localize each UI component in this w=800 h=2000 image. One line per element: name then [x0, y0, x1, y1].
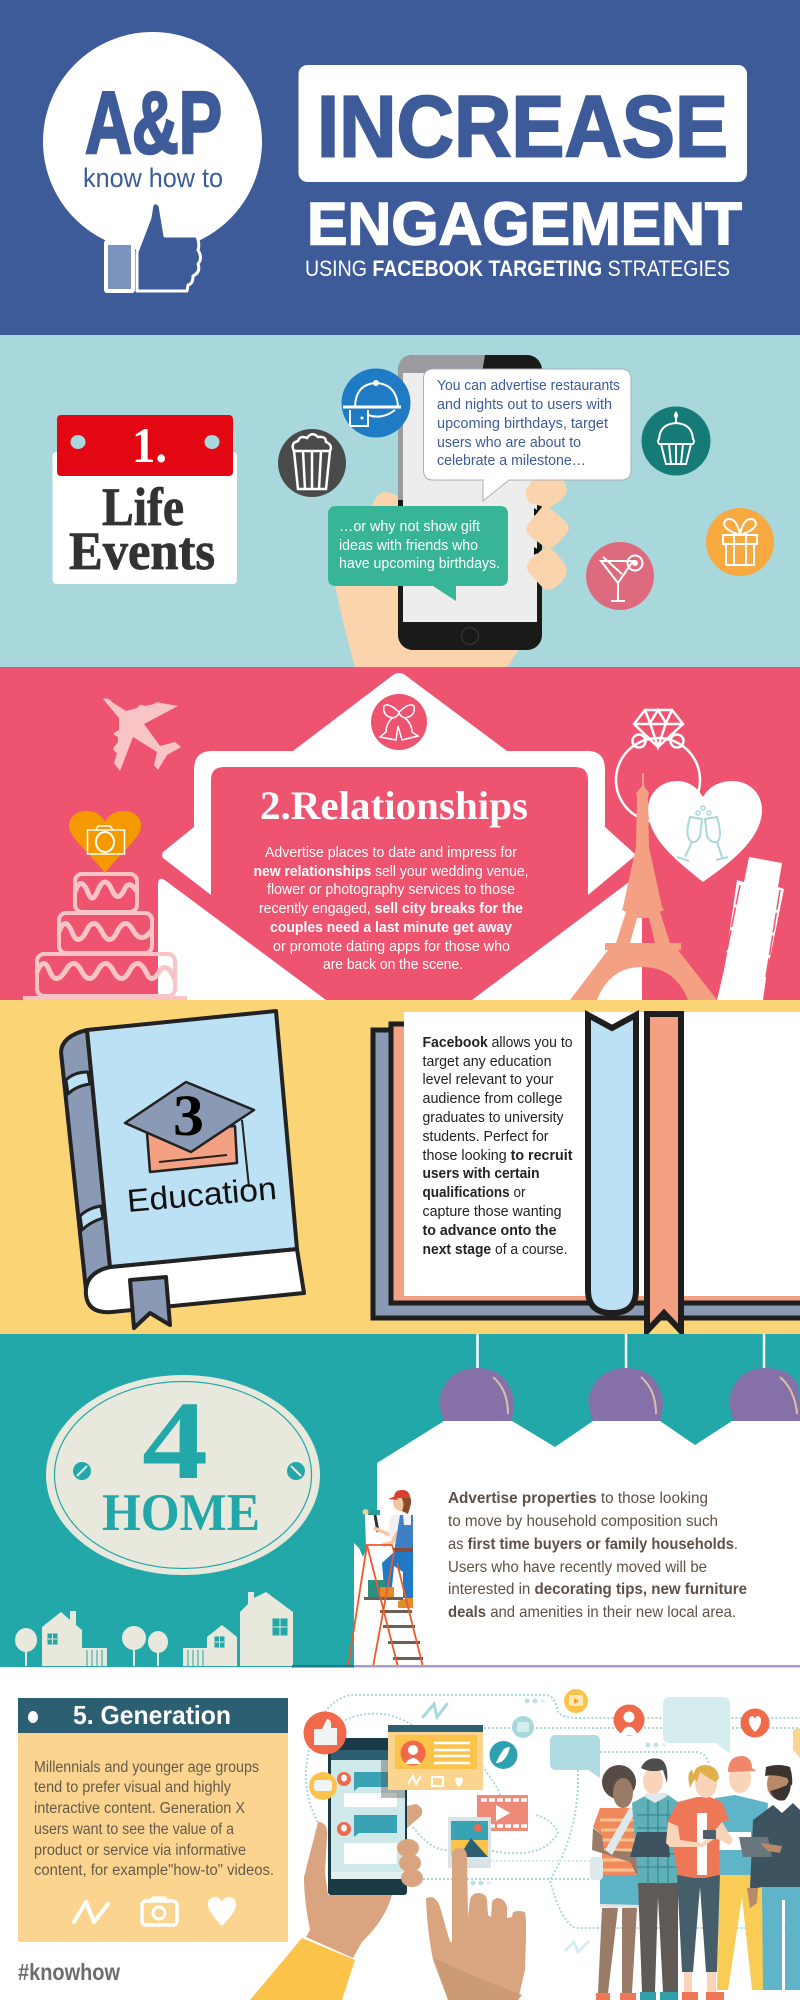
- speech bubble: restaurants: [424, 369, 631, 501]
- panel: generation: [0, 1668, 800, 2000]
- speech bubble: gift ideas: ideas with friends who: [339, 537, 478, 554]
- text: home body: Advertise properties to those looking: [448, 1490, 708, 1507]
- text: education body: graduates to university: [422, 1109, 564, 1126]
- icon: cocktail: [586, 542, 654, 610]
- calendar heading: Life: [102, 477, 184, 537]
- panel: home: [0, 1334, 800, 1667]
- speech bubble: restaurants: celebrate a milestone…: [437, 452, 586, 469]
- icon: gift: [706, 508, 774, 576]
- badge: 4 home: [46, 1375, 320, 1575]
- icon: eiffel tower: [570, 773, 717, 1000]
- logo: A&P balloon: A&P: [85, 73, 222, 172]
- illustration: painter on ladder: [348, 1490, 423, 1667]
- panel: life events: [0, 335, 800, 667]
- title: engagement: ENGAGEMENT: [307, 190, 742, 258]
- speech bubble: gift ideas: have upcoming birthdays.: [339, 555, 500, 572]
- card: profile: [388, 1725, 483, 1790]
- network dotted lines: [306, 1695, 800, 1928]
- text: education body: qualifications or: [422, 1184, 526, 1201]
- icon: thumbs up: [104, 203, 200, 293]
- calendar heading: Events: [69, 521, 215, 581]
- illustration: group of people: [590, 1756, 800, 2000]
- text: education body: [422, 1034, 572, 1258]
- person: woman with shoulder bag: [590, 1765, 648, 2000]
- text: relationships body: are back on the scene.: [323, 956, 463, 973]
- text: education body: target any education: [422, 1053, 552, 1070]
- card: generation: [18, 1698, 288, 1942]
- icon: popcorn: [278, 429, 346, 497]
- illustration: hand with phone: [250, 1738, 423, 2000]
- text: relationships body: recently engaged, sell city breaks for the: [259, 900, 523, 917]
- illustration: wedding cake: [23, 874, 187, 1000]
- icon: heart with champagne: [648, 781, 762, 882]
- text: home body: to move by household composition such: [448, 1513, 718, 1530]
- illustration: hand holding phone: [335, 355, 569, 667]
- text: education body: level relevant to your: [422, 1071, 554, 1088]
- text: education body: audience from college: [422, 1090, 562, 1107]
- heading: education: Education: [125, 1170, 278, 1219]
- icon: graduation cap: [125, 1082, 254, 1187]
- person: man with plaid shirt: [630, 1758, 680, 2000]
- text: education body: to advance onto the: [422, 1222, 556, 1239]
- text: education body: users with certain: [422, 1165, 540, 1182]
- icon: heart circle: [740, 1708, 770, 1738]
- badge: 4 home: 4: [142, 1379, 208, 1503]
- card: generation: content, for example"how-to" videos.: [34, 1862, 274, 1879]
- logo: A&P balloon: [43, 32, 262, 251]
- speech bubble: small: [550, 1735, 600, 1778]
- text: relationships body: new relationships sell your wedding venue,: [254, 863, 528, 880]
- icon: camera: [142, 1898, 177, 1925]
- text: relationships body: [254, 844, 528, 973]
- card: generation: users want to see the value of a: [34, 1821, 234, 1838]
- icon: chat circle: [309, 1772, 337, 1800]
- speech bubble: large: [663, 1697, 730, 1754]
- speech bubble: restaurants: and nights out to users with: [437, 396, 612, 413]
- illustration: pointing hand: [426, 1848, 526, 2000]
- speech bubble: edge: [793, 1728, 800, 1758]
- icon: camera circle: [512, 1716, 534, 1738]
- wall with pendant lamps: [354, 1334, 800, 1665]
- text: education body: those looking to recruit: [422, 1147, 572, 1164]
- text: relationships body: or promote dating apps for those who: [273, 938, 510, 955]
- person: bearded man: [739, 1765, 800, 1990]
- panel: relationships: [0, 667, 800, 1000]
- person: woman with phone: [666, 1765, 733, 2000]
- speech bubble: restaurants: users who are about to: [437, 434, 581, 451]
- icon: wedding bells: [371, 694, 427, 750]
- text: education body: students. Perfect for: [422, 1128, 549, 1145]
- icon: cupcake: [642, 406, 710, 476]
- speech bubble: restaurants: You can advertise restaurants: [437, 377, 620, 394]
- text: home body: interested in decorating tips, new furniture: [448, 1581, 747, 1598]
- icon: play circle: [564, 1689, 588, 1713]
- icon: heart: [208, 1897, 236, 1926]
- card: video: [477, 1795, 528, 1831]
- text: education body: Facebook allows you to: [422, 1034, 572, 1051]
- heading: 3: 3: [173, 1083, 204, 1148]
- panel: header: [0, 0, 800, 335]
- text: home body: as first time buyers or family households.: [448, 1536, 738, 1553]
- icon: leaning tower: [717, 857, 784, 1000]
- card: generation: Millennials and younger age groups: [34, 1759, 259, 1776]
- icon: twitter circle: [490, 1741, 518, 1769]
- title: increase: INCREASE: [317, 78, 728, 176]
- text: relationships body: Advertise places to date and impress for: [265, 844, 517, 861]
- speech bubble: gift ideas: [328, 506, 508, 601]
- icon: heart with camera: [69, 811, 141, 873]
- panel: education: [0, 1000, 800, 1335]
- icon: airplane: [103, 698, 181, 771]
- speech bubble: gift ideas: …or why not show gift: [339, 518, 481, 535]
- icon: faint trend top: [423, 1704, 447, 1717]
- person: man with cap: [715, 1756, 768, 1990]
- hashtag: #knowhow: [18, 1959, 120, 1985]
- text: education body: next stage of a course.: [422, 1241, 568, 1258]
- text: home body: Users who have recently moved will be: [448, 1559, 707, 1576]
- card: generation: product or service via informative: [34, 1842, 246, 1859]
- badge: 4 home: HOME: [102, 1484, 260, 1542]
- illustration: open book: [373, 1012, 800, 1331]
- illustration: house silhouettes: [15, 1592, 293, 1666]
- calendar heading: [52, 415, 237, 584]
- text: home body: deals and amenities in their new local area.: [448, 1604, 736, 1621]
- text: home body: [448, 1490, 747, 1621]
- text: education body: capture those wanting: [422, 1203, 562, 1220]
- logo: A&P balloon: know how to: [83, 163, 223, 193]
- heading: relationships: 2.Relationships: [260, 783, 528, 828]
- icon: restaurant cloche: [342, 368, 410, 438]
- icon: diamond ring: [616, 710, 700, 822]
- subtitle: USING FACEBOOK TARGETING STRATEGIES: [305, 256, 730, 281]
- card: photo: [448, 1817, 491, 1868]
- text: relationships body: couples need a last minute get away: [270, 919, 513, 936]
- floor strip: [292, 1665, 800, 1668]
- icon: faint trend bottom: [566, 1942, 588, 1952]
- illustration: closed book: [61, 1011, 304, 1328]
- card: generation: interactive content. Generation X: [34, 1800, 246, 1817]
- dots: network nodes: [470, 1698, 666, 1886]
- calendar heading: 1.: [132, 417, 167, 473]
- icon: thumbs up circle: [304, 1712, 346, 1754]
- icon: trend line: [74, 1902, 108, 1922]
- card: generation: tend to prefer visual and highly: [34, 1779, 231, 1796]
- card: generation: 5. Generation: [73, 1700, 231, 1730]
- speech bubble: restaurants: upcoming birthdays, target: [437, 415, 609, 432]
- illustration: open envelope: [158, 673, 642, 1000]
- icon: person circle: [614, 1704, 644, 1736]
- text: relationships body: flower or photography services to those: [267, 881, 515, 898]
